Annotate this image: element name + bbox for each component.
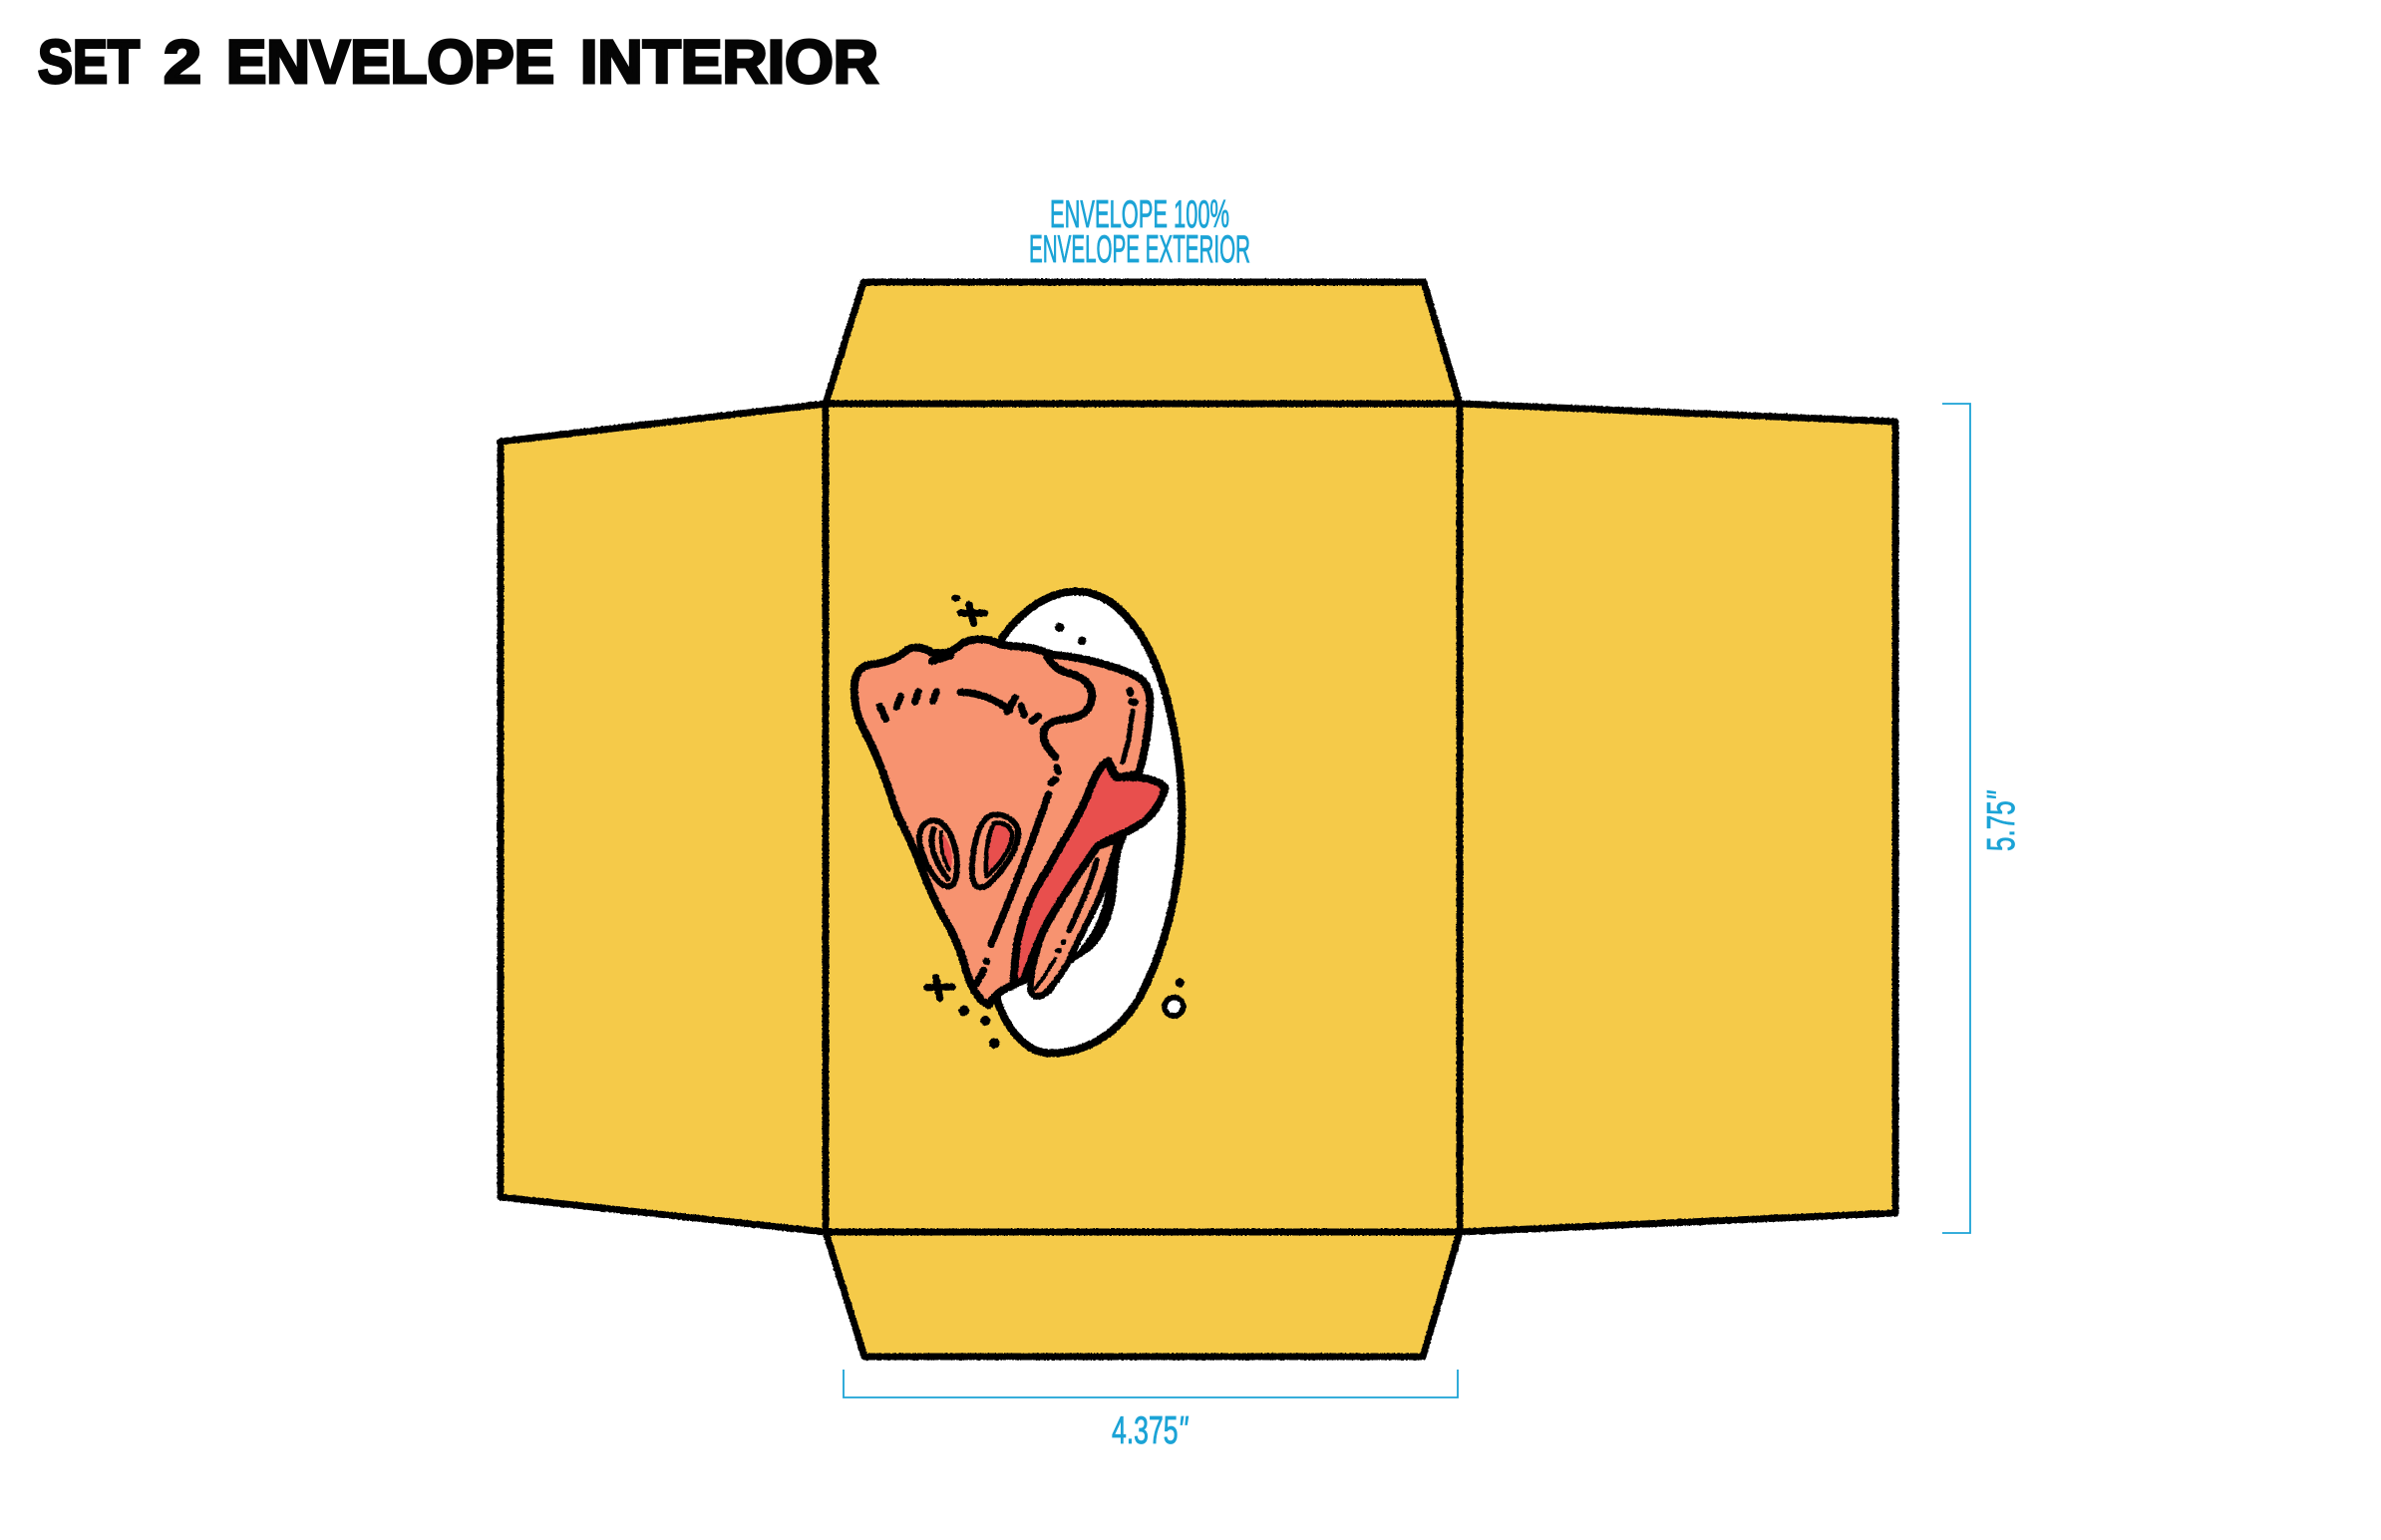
lower crust lines [1035,860,1097,989]
crust edge line [1043,656,1092,757]
pie slice body [854,639,1150,1005]
title: ENVELOPE [226,28,554,96]
height bracket [1942,404,1970,1233]
left flap [501,404,826,1232]
title: 2 [164,28,201,96]
width bracket [844,1370,1458,1397]
envelope label [1029,193,1250,271]
sparkles and crumbs [927,595,1185,1049]
width label: 4.375" [1112,1409,1189,1452]
crust dashes [879,691,1135,984]
envelope die-line [501,282,1895,1357]
height label: 5.75" [1980,790,2023,851]
strawberry left [919,820,957,886]
top flap [826,282,1460,404]
title: SET [38,28,140,96]
plate crumbs [1055,623,1086,645]
strawberry right [972,814,1018,887]
title [38,28,878,96]
bottom flap [826,1232,1460,1357]
lower crust layer [1030,839,1119,997]
title: INTERIOR [580,28,878,96]
red jam filling [1014,761,1165,985]
illustration: pie slice on plate [854,591,1185,1054]
envelope label: ENVELOPE EXTERIOR [1029,228,1250,271]
lower shadow with white slit [1050,837,1124,990]
envelope label: ENVELOPE 100% [1050,193,1229,236]
right flap [1460,404,1895,1232]
centre panel [826,404,1460,1232]
plate [997,591,1182,1054]
crust notch [932,655,950,661]
